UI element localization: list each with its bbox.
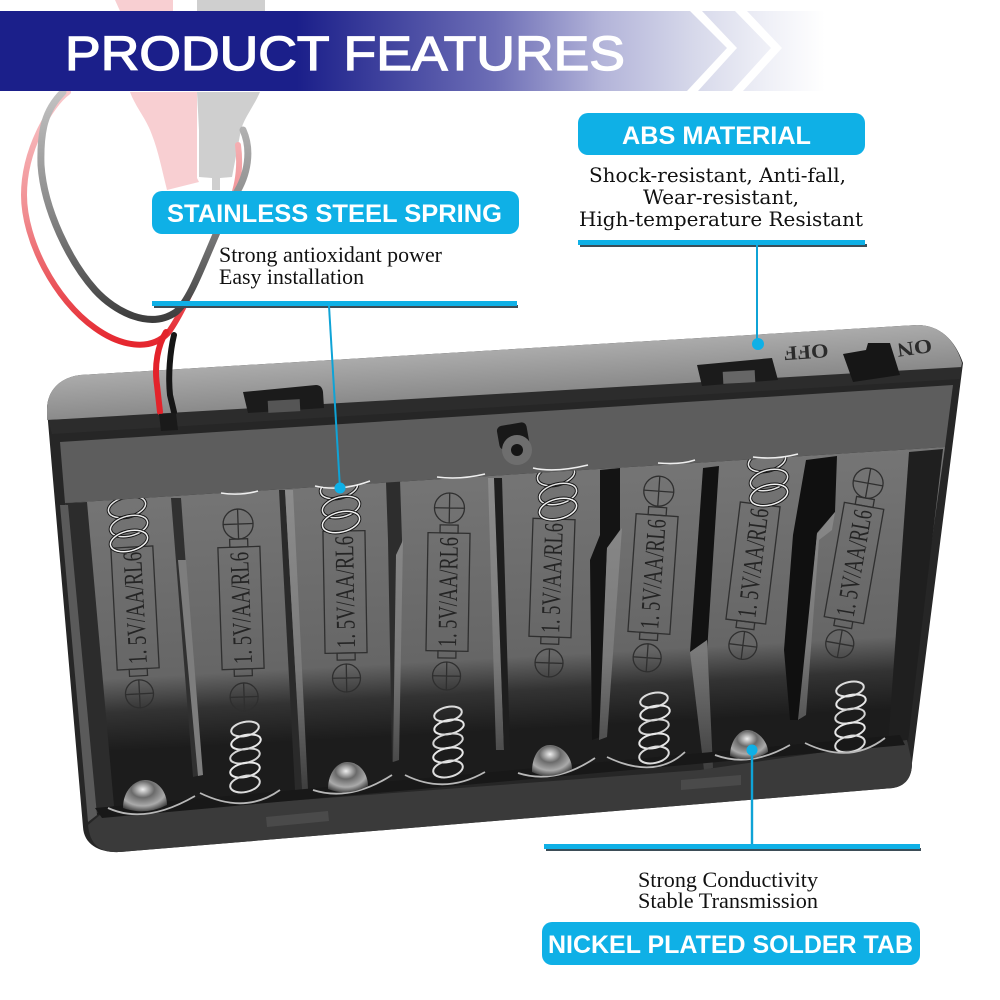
rule — [544, 844, 920, 849]
moulded label: bay 8 — [818, 465, 890, 661]
description line 2: Easy installation — [219, 264, 364, 289]
arrow: chevron 1 — [687, 11, 737, 91]
alligator clip: black — [197, 0, 265, 190]
moulded label: bay 3: 1. 5V/AA/RL6 — [329, 536, 361, 648]
sliding cover — [60, 385, 953, 503]
holder body — [47, 325, 963, 852]
wire: black to holder — [169, 335, 174, 412]
top springs — [106, 447, 790, 555]
rim recess — [681, 775, 741, 790]
divider 7 — [784, 456, 837, 720]
title: PRODUCT FEATURES — [65, 28, 625, 81]
moulded label: bay 4 — [425, 493, 471, 690]
wire clip — [159, 413, 178, 431]
heading pill — [578, 113, 865, 155]
description line 2: Stable Transmission — [638, 888, 818, 913]
description: Shock-resistant, Anti-fall, — [589, 164, 846, 187]
leader dot — [746, 744, 758, 756]
heading pill — [152, 191, 519, 234]
moulded label: bay 7 — [721, 502, 780, 662]
test leads — [24, 92, 248, 345]
heading: ABS MATERIAL — [622, 122, 811, 150]
battery holder — [47, 325, 963, 852]
moulded label: bay 2: 1. 5V/AA/RL6 — [224, 552, 258, 664]
leader line — [756, 245, 758, 344]
description: Strong Conductivity — [638, 867, 818, 892]
divider 5 — [590, 468, 622, 740]
callout: nickel plated solder tab — [542, 744, 921, 965]
wire: red lead — [24, 92, 239, 345]
right wall — [888, 449, 943, 745]
heading: STAINLESS STEEL SPRING — [167, 200, 502, 228]
moulded label: bay 1 — [111, 546, 161, 709]
lid top surface — [47, 325, 962, 420]
contact strip — [95, 735, 905, 818]
bottom springs — [229, 679, 867, 795]
rule shadow — [580, 244, 867, 247]
callout: stainless steel spring — [152, 191, 519, 494]
lid front edge — [48, 367, 962, 434]
moulded label: bay 1: 1. 5V/AA/RL6 — [117, 551, 153, 665]
divider 4 — [488, 478, 510, 750]
right tab — [697, 358, 778, 386]
bottom rim — [88, 740, 912, 852]
rule shadow — [546, 848, 921, 851]
divider 2 — [279, 490, 308, 790]
banner — [0, 11, 825, 91]
slide switch — [843, 343, 900, 382]
moulded label: bay 3 — [323, 531, 368, 692]
heading: NICKEL PLATED SOLDER TAB — [548, 931, 913, 959]
moulded label: bay 7: 1. 5V/AA/RL6 — [731, 507, 775, 619]
moulded label: bay 5 — [528, 518, 575, 678]
leader line — [751, 750, 753, 845]
lid marking: OFF: OFF — [783, 339, 829, 364]
divider 3 — [386, 480, 403, 762]
description line 3: High-temperature Resistant — [579, 208, 863, 231]
moulded label: bay 6 — [625, 475, 681, 673]
wire: red to holder — [156, 332, 166, 412]
left tab — [243, 385, 324, 413]
heading pill — [542, 922, 920, 965]
rule — [578, 240, 865, 245]
solder tab domes — [123, 730, 768, 811]
divider 6 — [690, 466, 719, 770]
contact plates — [108, 738, 885, 814]
arrow: chevron 2 — [732, 11, 782, 91]
cover post — [496, 422, 532, 465]
moulded label: bay 5: 1. 5V/AA/RL6 — [535, 523, 569, 633]
wire: gray lead — [41, 92, 248, 319]
divider 1 — [171, 498, 203, 777]
lid marking: ON: ON — [895, 334, 933, 361]
description: Strong antioxidant power — [219, 242, 443, 267]
moulded label: bay 4: 1. 5V/AA/RL6 — [432, 537, 464, 647]
leader line — [329, 306, 340, 488]
leader dot — [334, 482, 346, 494]
moulded label: bay 6: 1. 5V/AA/RL6 — [634, 518, 672, 630]
rule shadow — [154, 305, 518, 308]
rule — [152, 301, 517, 306]
contact highlights — [221, 454, 798, 494]
rim recess — [266, 811, 329, 827]
moulded label: bay 8: 1. 5V/AA/RL6 — [830, 507, 878, 619]
bay floor — [65, 447, 945, 815]
moulded label: bay 2 — [217, 508, 266, 712]
left wall — [65, 502, 114, 815]
description line 2: Wear-resistant, — [643, 186, 799, 209]
callout: ABS material — [578, 113, 867, 350]
leader dot — [752, 338, 764, 350]
alligator clip: red — [115, 0, 199, 190]
banner background — [0, 11, 825, 91]
